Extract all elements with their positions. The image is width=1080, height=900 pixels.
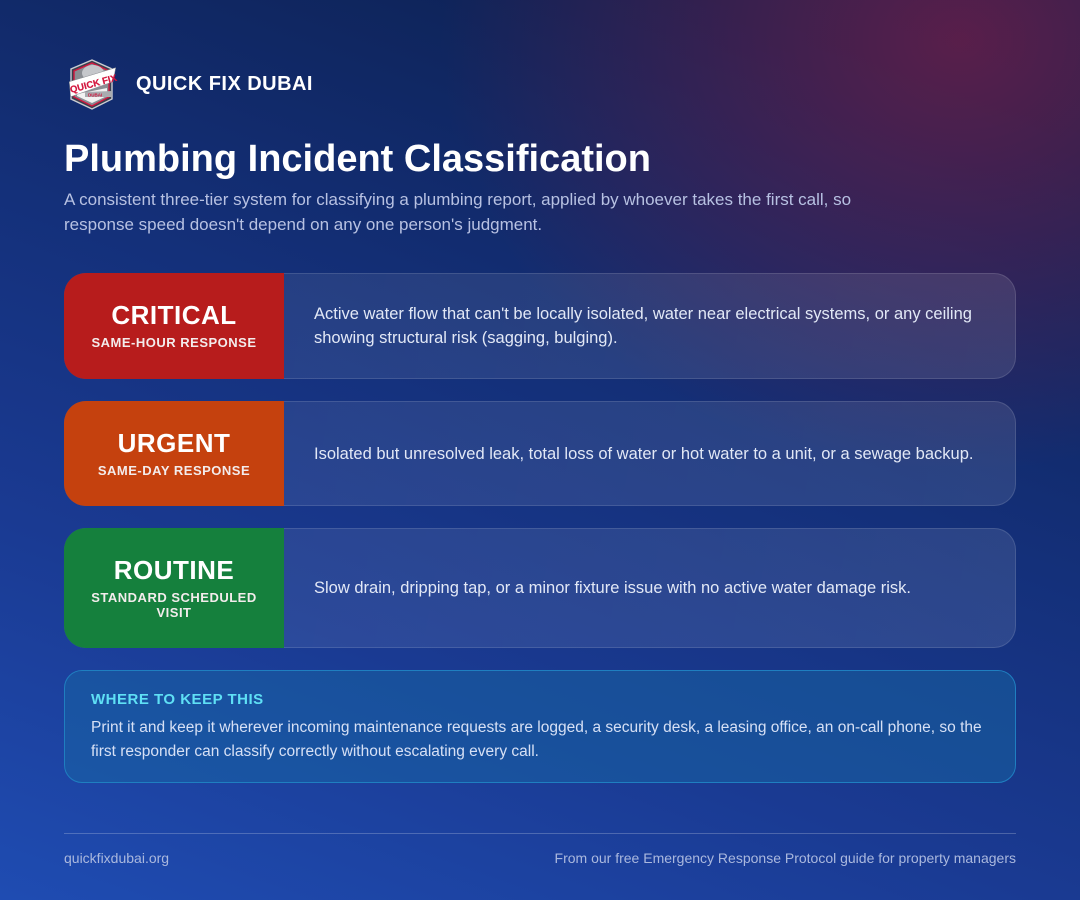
logo: Quick Fix Dubai badge <box>69 59 118 110</box>
critical label: CRITICAL <box>111 300 237 330</box>
routine label: ROUTINE <box>114 554 234 584</box>
panel: urgent <box>64 401 1016 506</box>
critical label: SAME-HOUR RESPONSE <box>91 335 257 350</box>
logo: Quick Fix Dubai badge: DUBAI <box>88 92 102 98</box>
panel: critical <box>64 273 1016 379</box>
urgent label: URGENT <box>118 428 230 458</box>
callout heading: WHERE TO KEEP THIS <box>91 691 264 708</box>
urgent description: Isolated but unresolved leak, total loss of water or hot water to a unit, or a sewage backup. <box>314 445 973 463</box>
footer: source: From our free Emergency Response Protocol guide for property managers <box>555 850 1016 866</box>
brand name: QUICK FIX DUBAI <box>136 73 313 95</box>
critical label <box>64 273 284 379</box>
routine description: Slow drain, dripping tap, or a minor fixture issue with no active water damage risk. <box>314 579 911 597</box>
title: Plumbing Incident Classification <box>64 138 651 180</box>
panel: routine <box>64 528 1016 648</box>
urgent label: SAME-DAY RESPONSE <box>98 462 250 478</box>
callout: where to keep this <box>64 670 1016 783</box>
subtitle: A consistent three-tier system for classifying a plumbing report, applied by whoever takes the first call, so response speed doesn't depend on any one person's judgment. <box>64 190 851 234</box>
urgent label <box>64 401 284 506</box>
routine label: STANDARD SCHEDULED VISIT <box>91 590 257 620</box>
logo: Quick Fix Dubai badge: QUICK FIX <box>69 73 118 96</box>
footer: website: quickfixdubai.org <box>64 850 169 866</box>
critical description: Active water flow that can't be locally isolated, water near electrical systems, or any ceiling showing structural risk (sagging, bulging). <box>314 304 972 347</box>
routine label <box>64 528 284 648</box>
callout text: Print it and keep it wherever incoming maintenance requests are logged, a security desk, a leasing office, an on-call phone, so the first responder can classify correctly without escalating every call. <box>91 719 982 760</box>
